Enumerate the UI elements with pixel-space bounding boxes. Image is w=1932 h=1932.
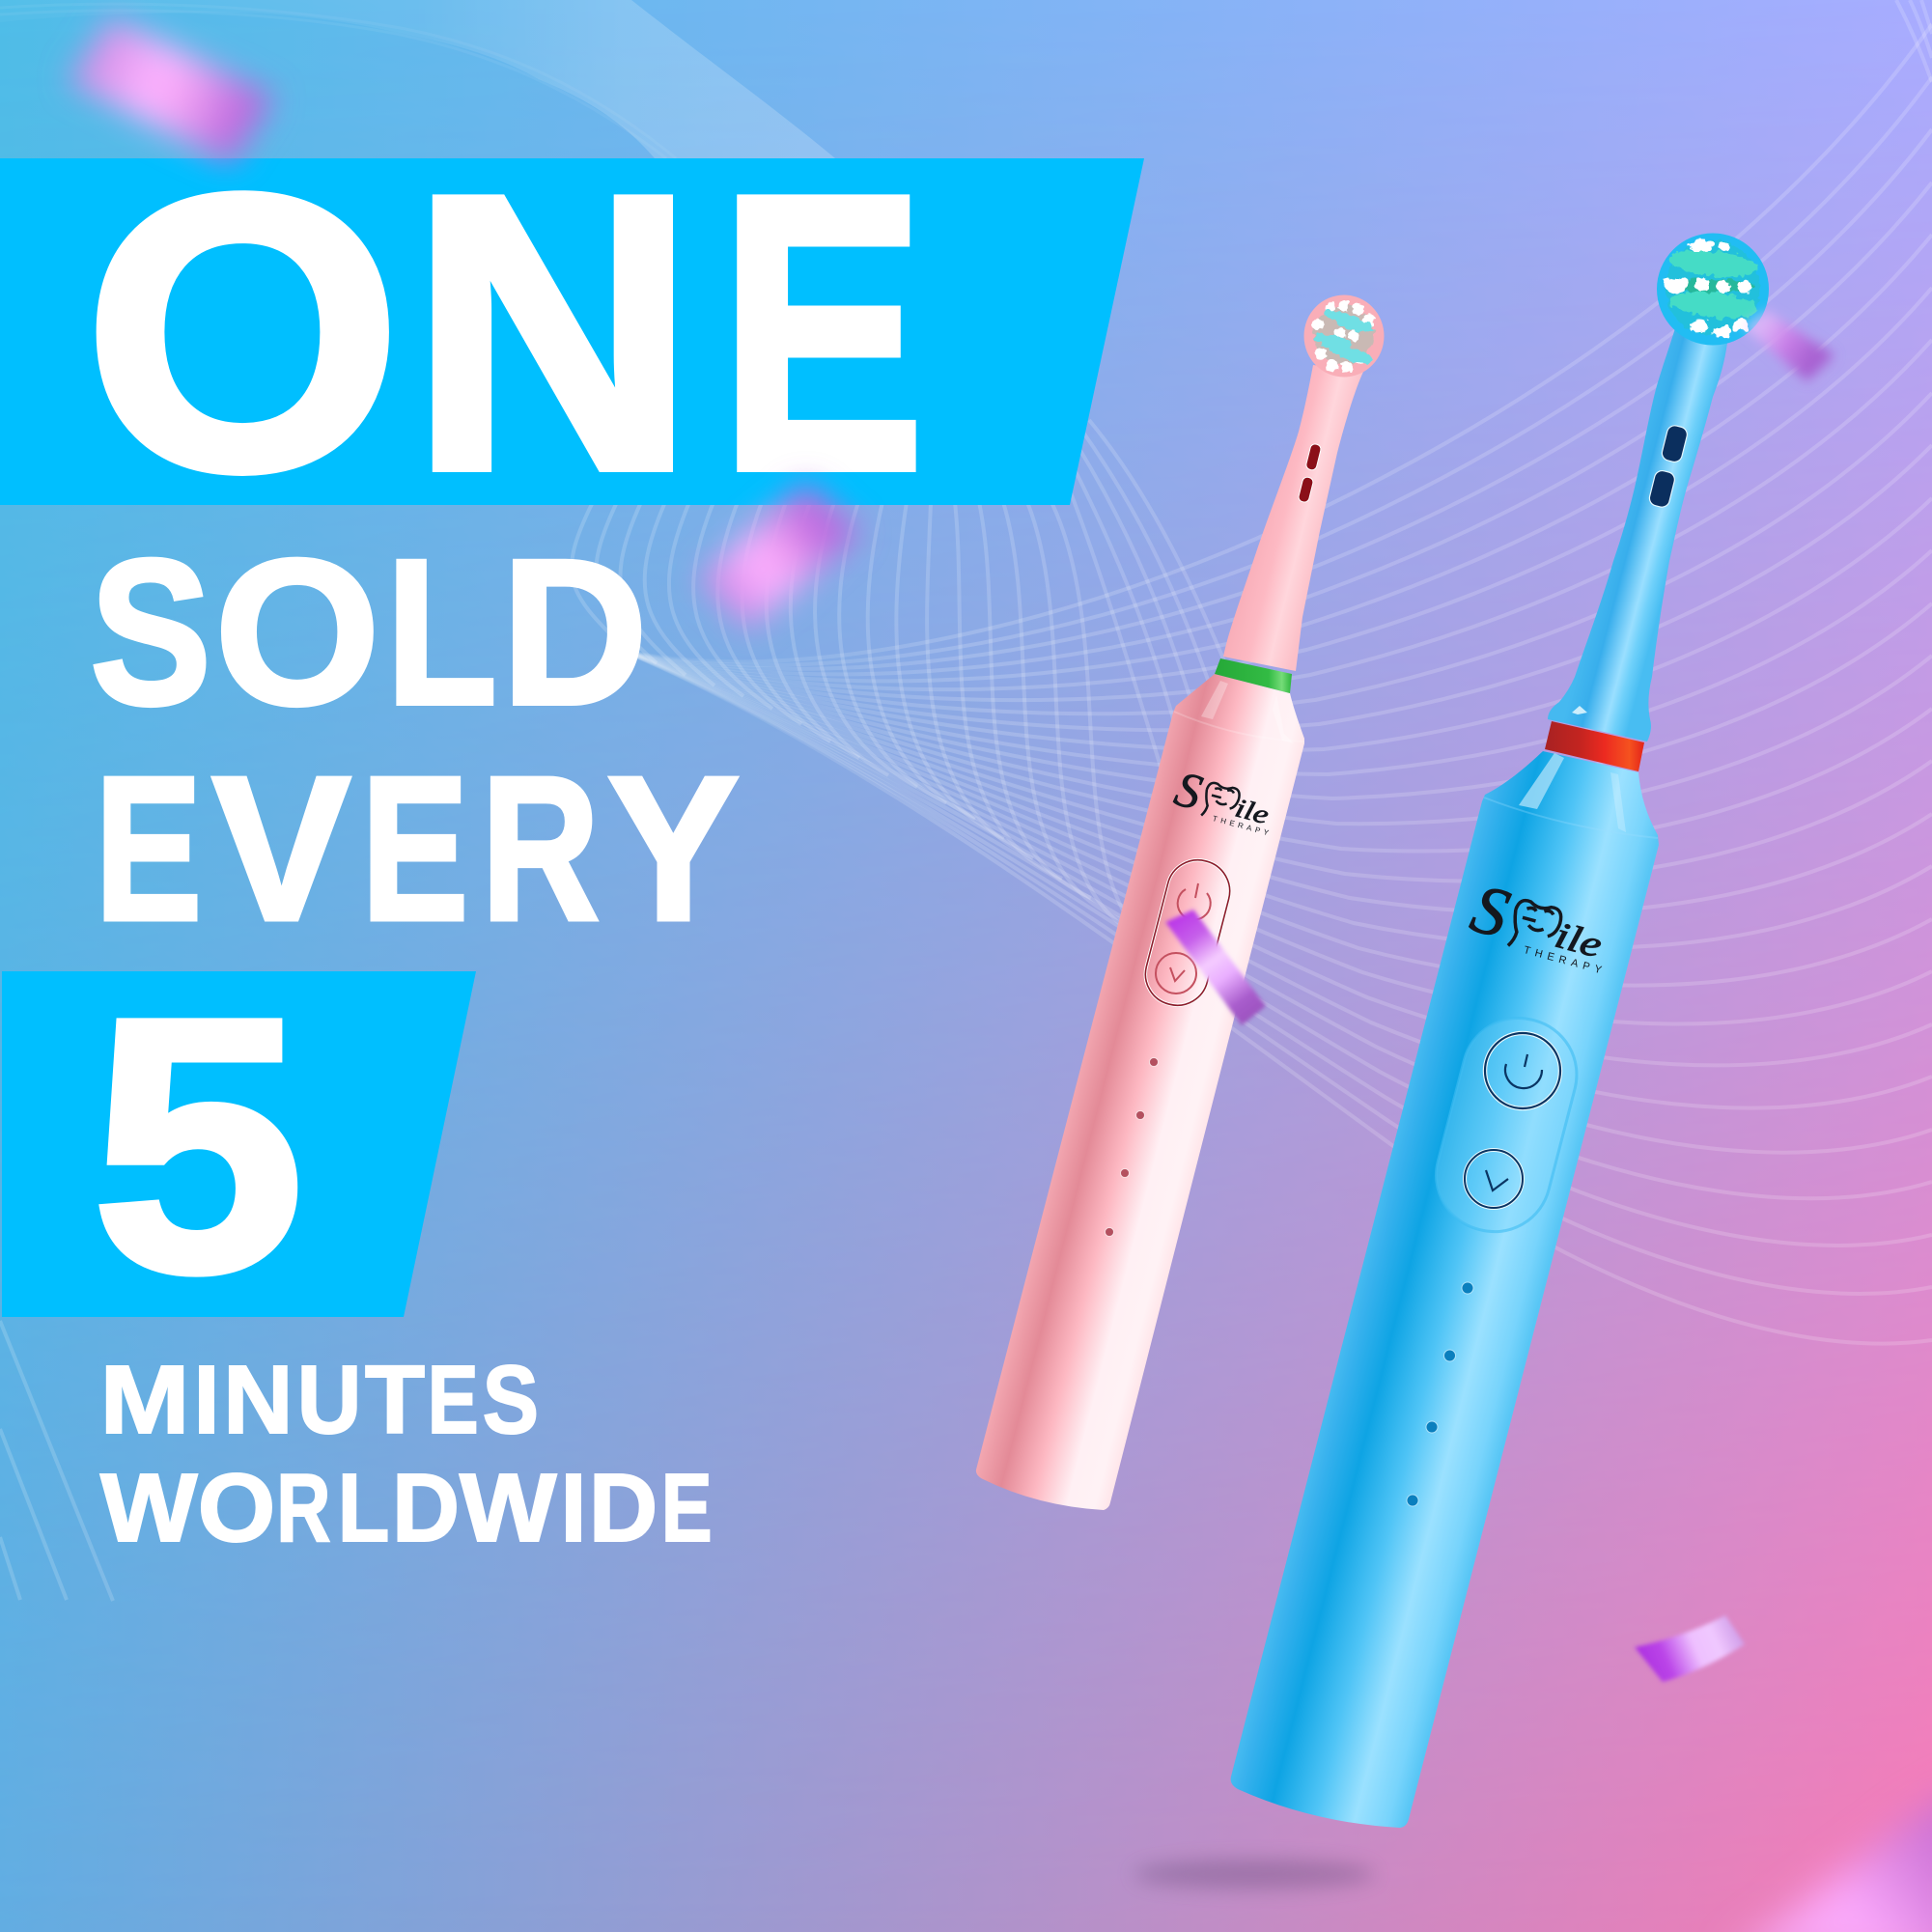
heading: EVERY: V xyxy=(212,734,350,963)
blue logo xyxy=(1464,869,1619,980)
blue neck xyxy=(1548,328,1728,742)
blue logo: THERAPY xyxy=(1523,944,1604,976)
pink logo: ile xyxy=(1232,793,1272,829)
text: WORLDWIDE: W xyxy=(100,1454,198,1562)
pink neck xyxy=(1223,365,1363,671)
confetti: on pink handle xyxy=(1165,910,1266,1025)
pink indicator dots xyxy=(1105,1058,1159,1236)
text: MINUTES: E xyxy=(428,1346,479,1454)
text: MINUTES: I xyxy=(193,1346,220,1454)
blue indicator dots xyxy=(1407,1282,1473,1506)
heading: ONE: O xyxy=(84,114,402,550)
heading: 5: 5 xyxy=(92,944,304,1347)
blue handle xyxy=(1231,751,1659,1828)
confetti: bottom right corner xyxy=(1728,1786,1932,1932)
red ring xyxy=(1545,721,1644,771)
pink handle xyxy=(976,674,1304,1510)
pink logo: S xyxy=(1169,762,1208,821)
text: MINUTES: U xyxy=(297,1346,361,1454)
banner: 5 xyxy=(2,971,476,1317)
blue logo: ile xyxy=(1551,915,1607,966)
heading: EVERY: R xyxy=(482,734,600,963)
confetti: centre xyxy=(697,483,861,630)
heading: SOLD: S xyxy=(91,518,211,747)
text: MINUTES: S xyxy=(483,1346,539,1454)
banner: ONE xyxy=(0,158,1144,505)
text: WORLDWIDE: I xyxy=(560,1454,587,1562)
text: WORLDWIDE: D xyxy=(589,1454,658,1562)
heading: ONE: E xyxy=(720,114,925,550)
text: MINUTES: T xyxy=(365,1346,425,1454)
text: WORLDWIDE: L xyxy=(338,1454,389,1562)
text: MINUTES: M xyxy=(100,1346,189,1454)
text: WORLDWIDE: R xyxy=(276,1454,330,1562)
confetti: lower right xyxy=(1635,1615,1745,1682)
pink shoulder highlight xyxy=(1201,681,1294,743)
blue toothbrush xyxy=(1231,234,1769,1828)
heading: SOLD: D xyxy=(502,518,647,747)
floor shadow xyxy=(1134,1860,1375,1889)
confetti: top left xyxy=(68,17,275,164)
text: WORLDWIDE: W xyxy=(460,1454,557,1562)
pink head xyxy=(1303,295,1385,377)
text: WORLDWIDE: O xyxy=(198,1454,275,1562)
pink logo: THERAPY xyxy=(1212,814,1271,837)
pink buttons xyxy=(1138,854,1237,1012)
heading: EVERY: Y xyxy=(608,734,739,963)
pink toothbrush xyxy=(976,295,1385,1510)
confetti: near blue head xyxy=(1743,311,1834,381)
heading: EVERY: E xyxy=(95,734,202,963)
text: WORLDWIDE: E xyxy=(661,1454,713,1562)
heading: SOLD: L xyxy=(386,518,497,747)
text: WORLDWIDE: D xyxy=(392,1454,460,1562)
blue air slots xyxy=(1648,424,1689,509)
blue shoulder highlight xyxy=(1484,753,1658,838)
heading: SOLD: O xyxy=(214,518,380,747)
pink air slots xyxy=(1298,443,1322,503)
green ring xyxy=(1215,658,1292,693)
heading: ONE: N xyxy=(410,114,695,550)
blue head xyxy=(1657,234,1769,346)
heading: EVERY: E xyxy=(361,734,468,963)
text: MINUTES: N xyxy=(223,1346,294,1454)
blue logo: S xyxy=(1464,869,1517,953)
blue button panel xyxy=(1424,1006,1589,1244)
pink logo xyxy=(1169,762,1281,841)
